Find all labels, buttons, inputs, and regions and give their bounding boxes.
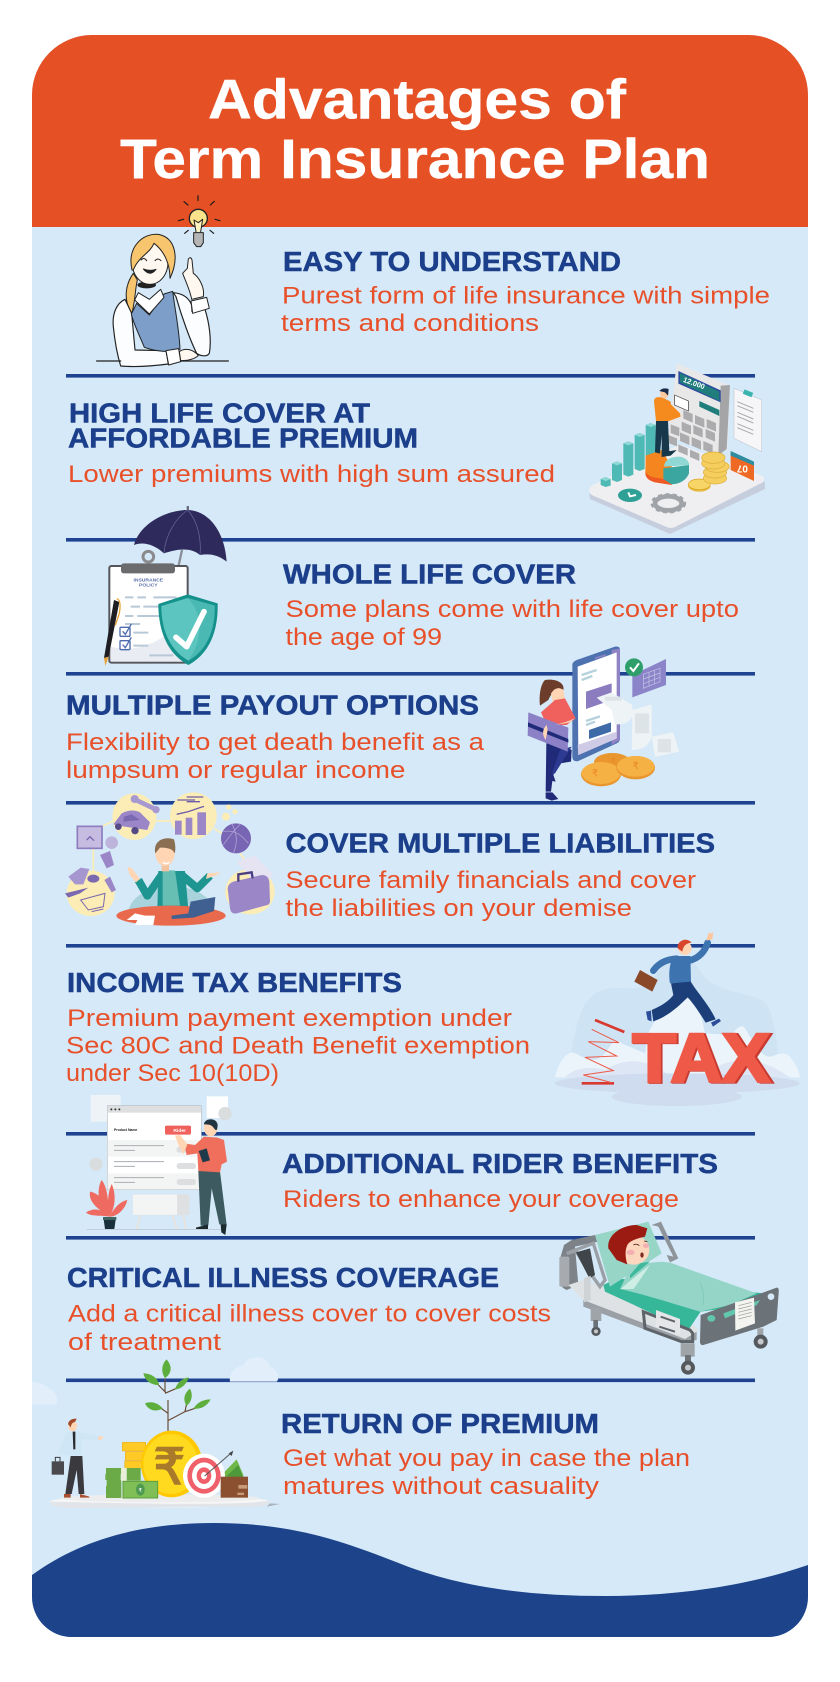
icon: man jumping over TAX <box>555 933 800 1106</box>
section: critical illness coverage <box>67 1262 551 1356</box>
icon: calculator with charts and coins <box>589 363 765 534</box>
section: return of premium <box>281 1408 690 1500</box>
section: income tax benefits: under Sec 10(10D) <box>66 1060 279 1087</box>
icon: rupee coin, growing plant, target and businessman: ₹ <box>139 1487 143 1494</box>
section: high life cover: AFFORDABLE PREMIUM <box>68 422 418 454</box>
section: additional rider benefits: ADDITIONAL RIDER BENEFITS <box>282 1148 718 1179</box>
section: income tax benefits <box>66 967 530 1087</box>
section: whole life cover <box>283 558 739 651</box>
section: cover multiple liabilities: COVER MULTIPLE LIABILITIES <box>286 828 715 858</box>
icon: woman with card, phone and rupee coins: ₹ <box>592 769 598 780</box>
section: whole life cover: WHOLE LIFE COVER <box>283 558 576 590</box>
icon: man pointing at rider product window <box>86 1095 232 1235</box>
section: easy to understand <box>281 246 770 337</box>
section: income tax benefits: INCOME TAX BENEFITS <box>67 967 402 998</box>
icon: patient in hospital bed <box>559 1222 779 1375</box>
section: cover multiple liabilities <box>286 828 715 922</box>
section: cover multiple liabilities: the liabilities on your demise <box>286 895 632 922</box>
icon: man jumping over TAX: TAX <box>634 1020 773 1097</box>
icon: insurance policy clipboard with umbrella and shield <box>104 506 227 666</box>
icon: man pointing at rider product window: Product Name <box>114 1128 137 1132</box>
section: high life cover <box>68 398 555 488</box>
section: critical illness coverage: CRITICAL ILLNESS COVERAGE <box>67 1262 499 1293</box>
icon: insurance policy clipboard with umbrella and shield: INSURANCE <box>134 577 164 583</box>
section: additional rider benefits <box>282 1148 718 1213</box>
title: Term Insurance Plan <box>120 127 710 190</box>
section: high life cover: HIGH LIFE COVER AT <box>69 398 370 428</box>
section: multiple payout options <box>66 690 484 784</box>
section: return of premium: RETURN OF PREMIUM <box>281 1408 599 1439</box>
icon: man pointing at rider product window: Rider <box>173 1128 186 1134</box>
section: easy to understand: Purest form of life insurance with simple <box>282 282 770 310</box>
icon: woman with idea bulb <box>97 196 228 367</box>
section: easy to understand: terms and conditions <box>281 310 539 337</box>
icon: insurance policy clipboard with umbrella and shield: POLICY <box>139 582 158 588</box>
section: multiple payout options: lumpsum or regular income <box>66 757 406 784</box>
icon: calculator with charts and coins: 12.000 <box>682 375 706 391</box>
title: Advantages of <box>208 68 626 130</box>
section: income tax benefits: Sec 80C and Death Benefit exemption <box>66 1032 530 1060</box>
icon: woman with card, phone and rupee coins: ₹ <box>611 756 616 765</box>
icon: man at desk surrounded by liabilities <box>65 792 275 926</box>
section: whole life cover: Some plans come with life cover upto <box>286 596 739 623</box>
section: high life cover: Lower premiums with high sum assured <box>68 461 555 488</box>
section: additional rider benefits: Riders to enhance your coverage <box>283 1186 679 1213</box>
section: easy to understand: EASY TO UNDERSTAND <box>283 246 621 277</box>
icon: woman with card, phone and rupee coins: ₹ <box>632 761 639 772</box>
icon: woman with card, phone and rupee coins <box>528 646 679 801</box>
section: multiple payout options: MULTIPLE PAYOUT OPTIONS <box>66 690 479 720</box>
section: income tax benefits: Premium payment exemption under <box>67 1005 512 1032</box>
title <box>120 68 710 190</box>
section: return of premium: Get what you pay in case the plan <box>283 1445 690 1472</box>
section: cover multiple liabilities: Secure family financials and cover <box>286 867 696 894</box>
section: multiple payout options: Flexibility to get death benefit as a <box>66 729 484 756</box>
section: whole life cover: the age of 99 <box>286 624 442 651</box>
icon: rupee coin, growing plant, target and businessman <box>32 1357 280 1508</box>
bottom wave <box>32 1523 808 1637</box>
icon: man jumping over TAX: TAX <box>632 1019 770 1096</box>
section: return of premium: matures without casuality <box>283 1473 600 1500</box>
icon: calculator with charts and coins: 07 <box>736 463 748 474</box>
header band <box>32 35 808 227</box>
icon: rupee coin, growing plant, target and businessman: ₹ <box>153 1439 185 1495</box>
section: critical illness coverage: of treatment <box>68 1329 221 1356</box>
section: critical illness coverage: Add a critical illness cover to cover costs <box>68 1300 551 1328</box>
